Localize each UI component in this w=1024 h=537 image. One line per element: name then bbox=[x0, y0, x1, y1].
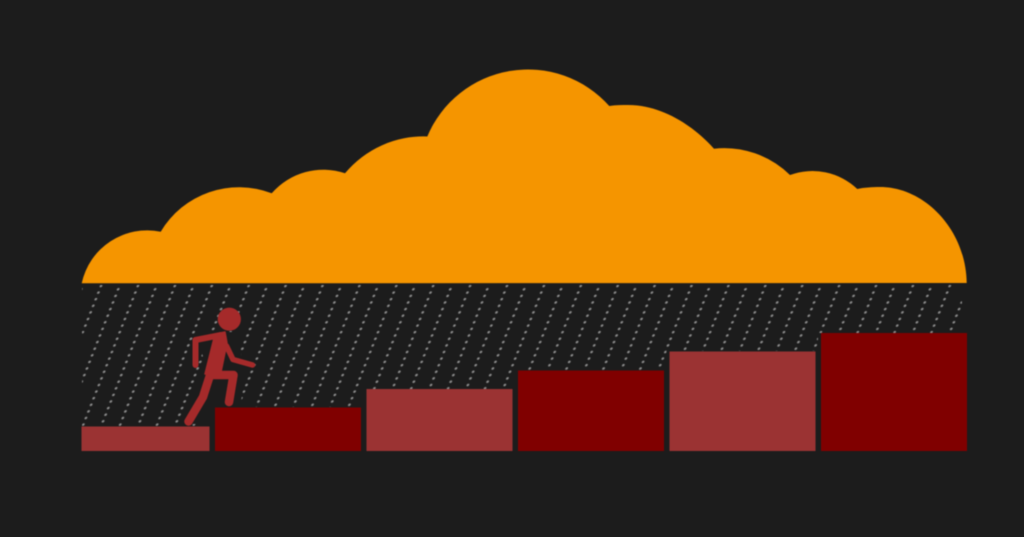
left arm bbox=[196, 335, 221, 365]
step 4 bbox=[518, 370, 664, 451]
step 2 bbox=[215, 408, 361, 451]
bar chart: six rising steps bbox=[82, 333, 967, 451]
front leg bbox=[212, 375, 234, 402]
step 5 bbox=[670, 352, 816, 451]
step 1 bbox=[82, 426, 210, 451]
step 6 bbox=[821, 333, 967, 451]
icon: orange cloud bbox=[82, 69, 967, 283]
head bbox=[218, 308, 241, 331]
right arm bbox=[226, 346, 252, 365]
gap in the rain behind the runner bbox=[192, 332, 246, 424]
torso bbox=[205, 332, 227, 374]
step 3 bbox=[366, 389, 512, 451]
icon: running figure bbox=[188, 308, 252, 422]
rain: dotted diagonal lines above the steps bbox=[82, 285, 962, 426]
back leg bbox=[188, 372, 211, 422]
